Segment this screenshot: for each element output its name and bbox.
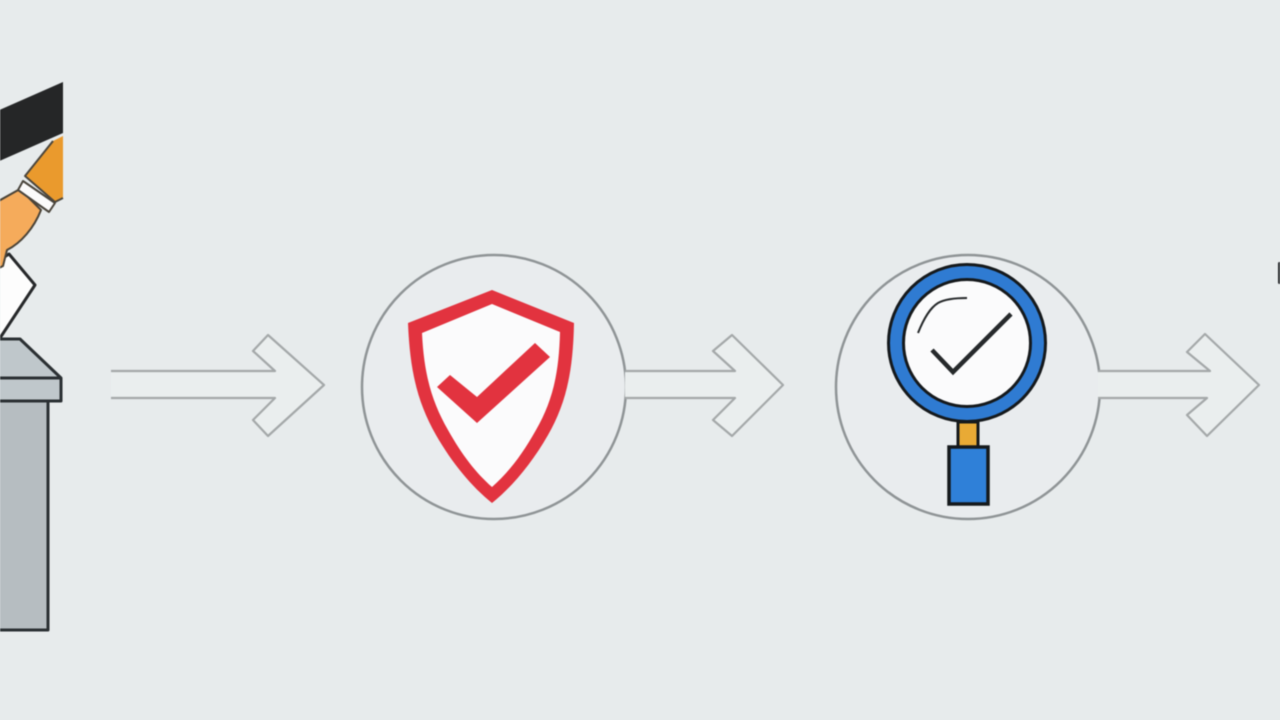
check mark bbox=[932, 314, 1011, 372]
check mark bbox=[437, 343, 550, 423]
neck bbox=[958, 422, 978, 448]
shield outline bbox=[408, 290, 574, 503]
white cuff bbox=[18, 181, 55, 212]
ballot box body bbox=[0, 400, 48, 630]
ballot box lid bbox=[0, 339, 61, 401]
suit sleeve bbox=[0, 82, 63, 163]
highlight bbox=[918, 298, 967, 333]
next step fragment bbox=[1278, 262, 1280, 284]
shield interior bbox=[422, 304, 560, 487]
arrow 3 bbox=[1098, 334, 1259, 436]
lens ring bbox=[896, 272, 1038, 414]
blue ring bbox=[896, 272, 1038, 414]
arrow 2 bbox=[625, 335, 783, 436]
circle: shield step bbox=[362, 255, 626, 519]
icon: red shield with check bbox=[408, 290, 574, 503]
circle: magnifier step bbox=[836, 255, 1100, 519]
hand bbox=[0, 189, 41, 270]
icon: magnifying glass with check bbox=[896, 272, 1038, 504]
grip bbox=[949, 447, 988, 504]
ballot paper bbox=[0, 254, 35, 338]
arrow 1 bbox=[111, 335, 324, 436]
icon: ballot box with hand casting vote bbox=[0, 82, 63, 630]
lid edge bbox=[0, 376, 61, 380]
sleeve edge bbox=[25, 141, 63, 202]
shirt sleeve bbox=[25, 136, 63, 202]
